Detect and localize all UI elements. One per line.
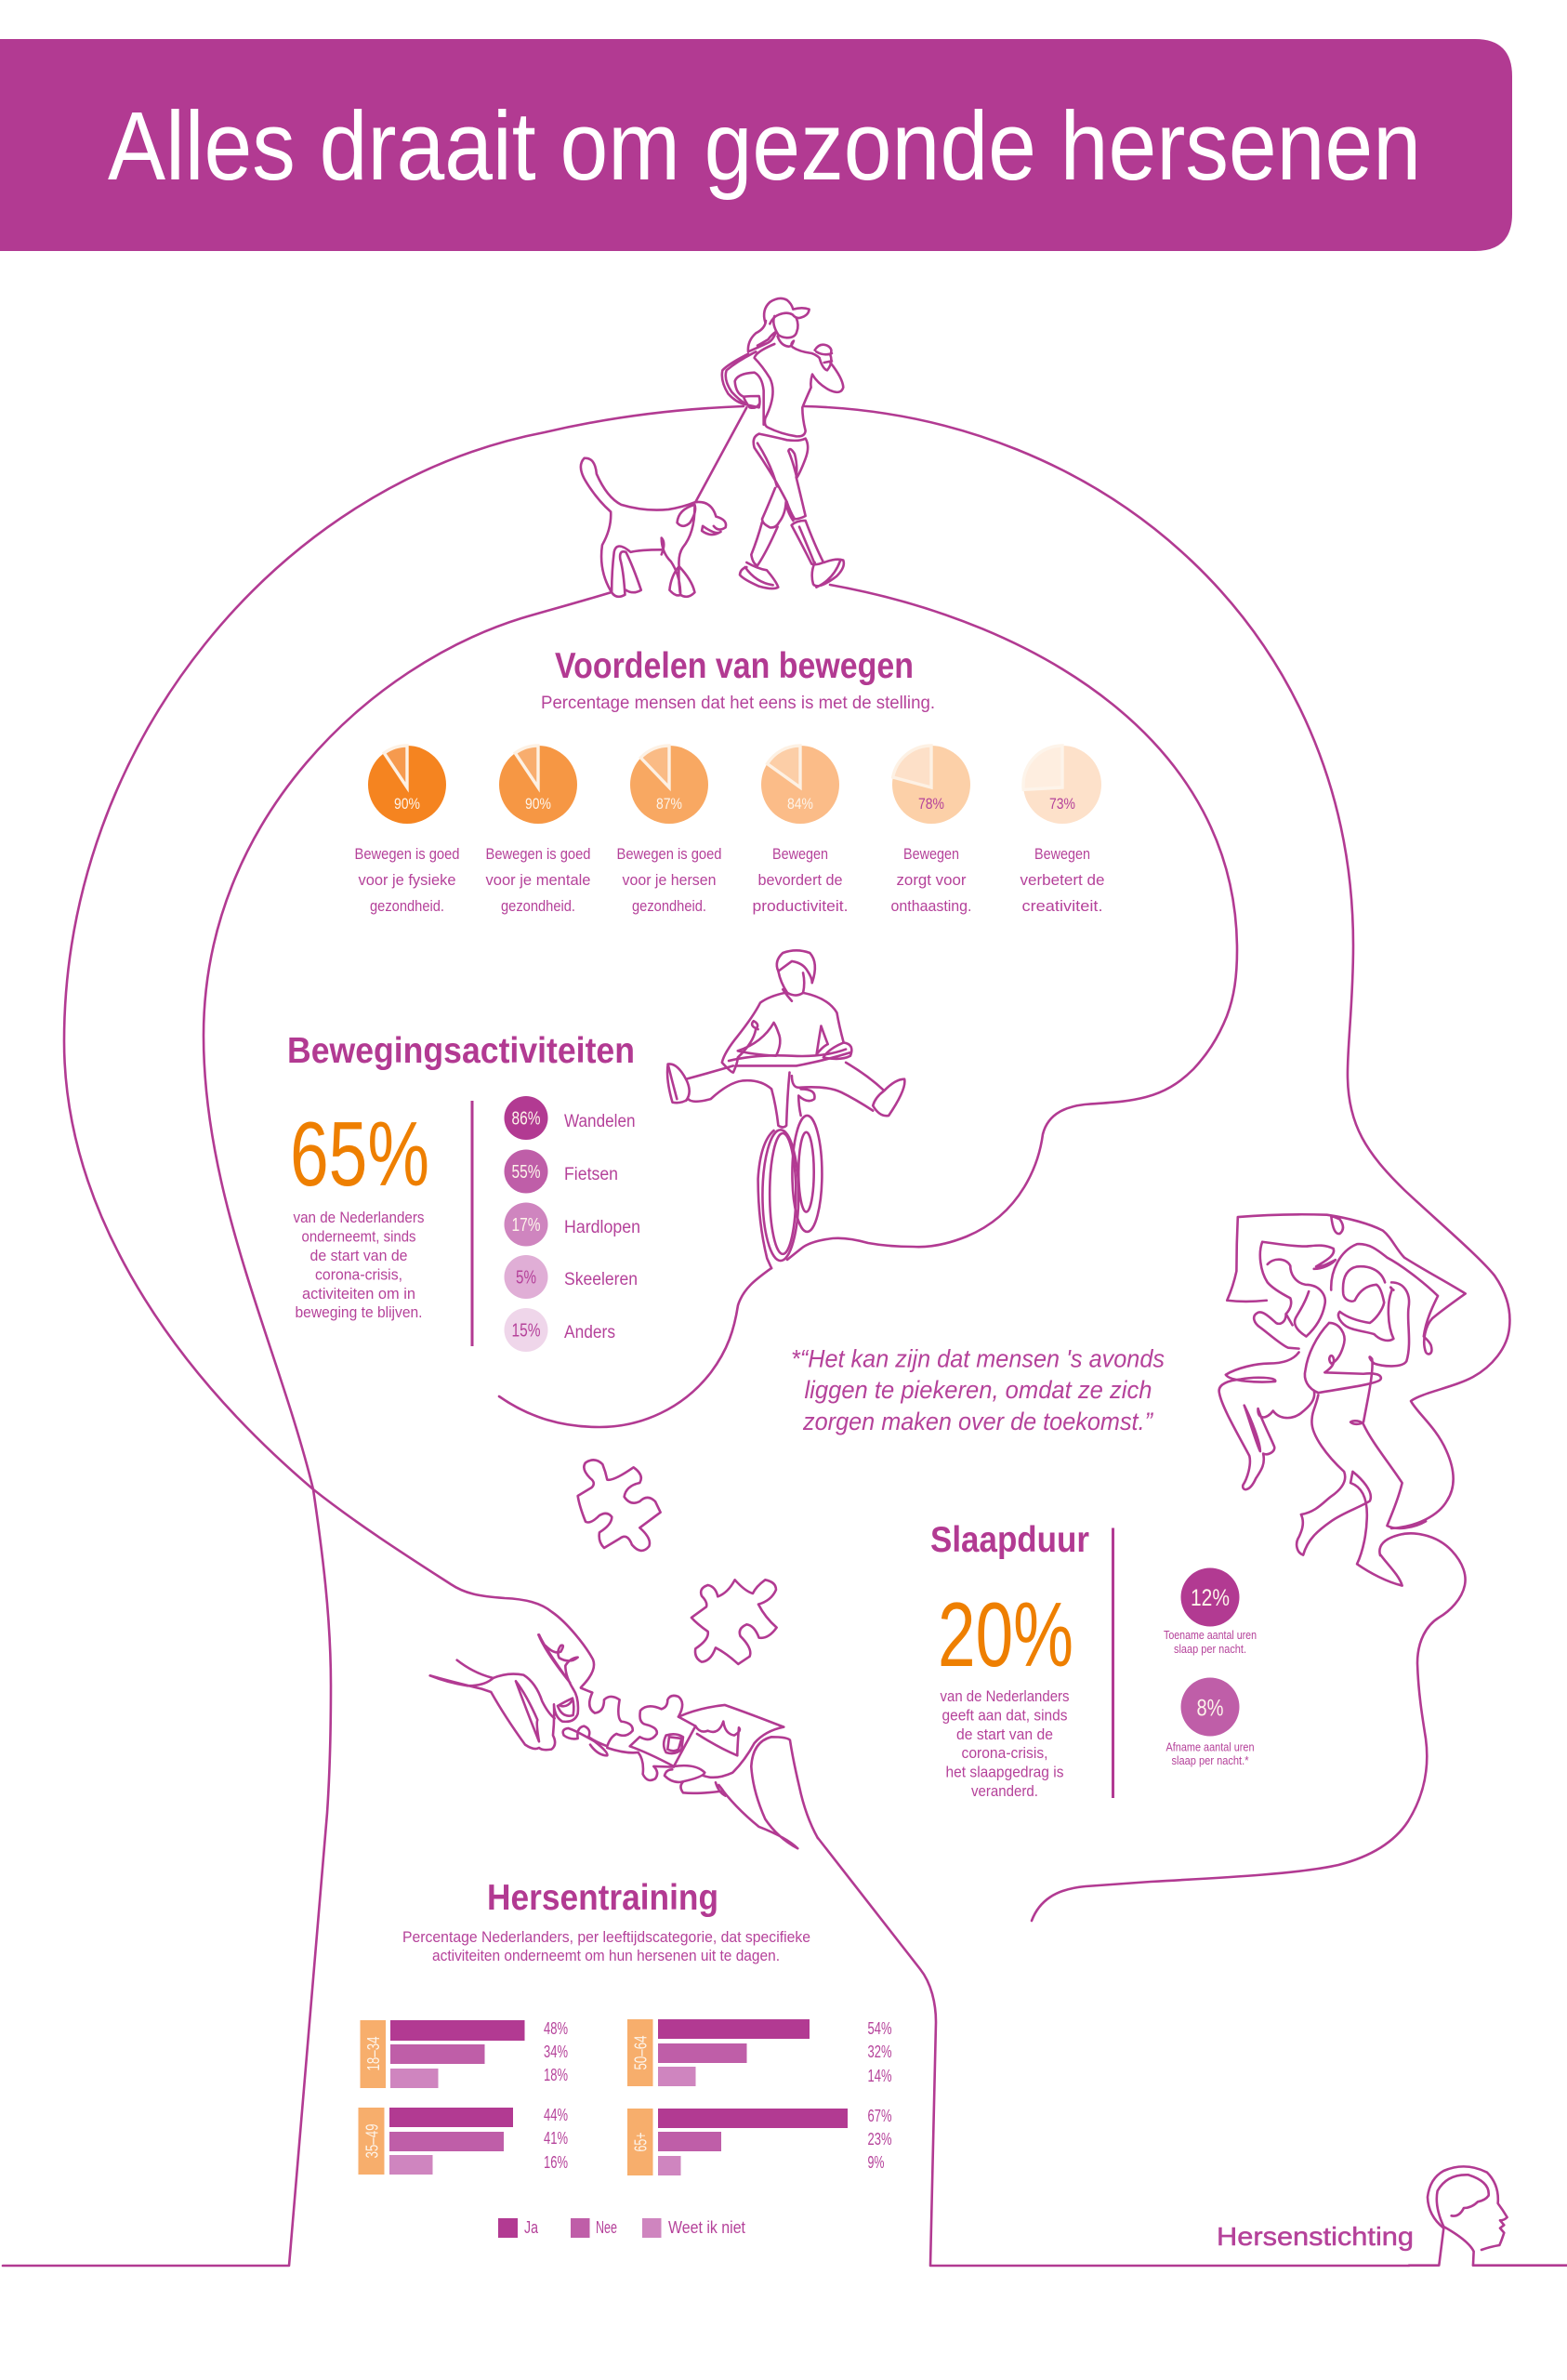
quote: zorgen maken over de toekomst.” bbox=[802, 1408, 1153, 1435]
description: het slaapgedrag is bbox=[946, 1763, 1063, 1781]
legend: Nee bbox=[596, 2218, 617, 2237]
stat: afname 8%: Afname aantal uren bbox=[1165, 1740, 1255, 1753]
bar group: 50–64: 54% bbox=[868, 2019, 892, 2038]
bar group: 50–64 bbox=[627, 2019, 892, 2086]
bar group: 18–34: 34% bbox=[544, 2043, 568, 2061]
stat: toename 12%: slaap per nacht. bbox=[1174, 1643, 1246, 1656]
brain outline: lower curl bbox=[499, 1268, 771, 1427]
legend: Weet ik niet bbox=[668, 2218, 745, 2237]
pie: productiviteit 84%: Bewegen bbox=[772, 845, 828, 863]
bar group: 65+ bbox=[627, 2107, 892, 2175]
description: corona-crisis, bbox=[315, 1266, 402, 1283]
description: veranderd. bbox=[971, 1782, 1038, 1800]
pie: productiviteit 84%: bevordert de bbox=[758, 871, 842, 889]
quote: liggen te piekeren, omdat ze zich bbox=[805, 1376, 1152, 1404]
illustration: sleeping couple bbox=[1219, 1214, 1466, 1586]
description: van de Nederlanders bbox=[941, 1687, 1069, 1705]
heading: Voordelen van bewegen bbox=[555, 646, 914, 686]
pie: fysieke gezondheid 90%: gezondheid. bbox=[370, 897, 444, 915]
logo head icon bbox=[1409, 2166, 1567, 2266]
head outline: neck back and baseline bbox=[3, 592, 612, 2266]
panel: voordelen van bewegen bbox=[355, 646, 1104, 915]
pie: onthaasting 78%: Bewegen bbox=[903, 845, 959, 863]
pie: fysieke gezondheid 90%: 90% bbox=[394, 795, 420, 813]
activity: fietsen: 55% bbox=[511, 1162, 541, 1183]
activity: anders bbox=[504, 1308, 615, 1352]
quote: *“Het kan zijn dat mensen 's avonds bbox=[791, 1344, 1165, 1372]
stat: toename 12%: 12% bbox=[1191, 1585, 1230, 1611]
bar group: 50–64: 14% bbox=[868, 2067, 892, 2085]
pie: fysieke gezondheid 90%: Bewegen is goed bbox=[355, 845, 459, 863]
description: beweging te blijven. bbox=[296, 1303, 422, 1321]
big number 65%: 65% bbox=[290, 1103, 429, 1205]
activity: fietsen: Fietsen bbox=[564, 1165, 618, 1184]
pie: creativiteit 73%: Bewegen bbox=[1034, 845, 1090, 863]
pie: mentale gezondheid 90%: voor je mentale bbox=[485, 871, 591, 889]
activity: anders: Anders bbox=[564, 1323, 615, 1342]
stat: toename 12% bbox=[1164, 1567, 1257, 1656]
panel: hersentraining bbox=[359, 1878, 892, 2238]
heading: Slaapduur bbox=[930, 1520, 1089, 1560]
activity: hardlopen: Hardlopen bbox=[564, 1218, 640, 1237]
activity: anders: 15% bbox=[511, 1320, 541, 1341]
illustration: dog bbox=[581, 458, 726, 597]
pie: hersen gezondheid 87%: Bewegen is goed bbox=[617, 845, 721, 863]
stat: afname 8%: 8% bbox=[1197, 1696, 1223, 1722]
subheading: activiteiten onderneemt om hun hersenen uit te dagen. bbox=[432, 1947, 780, 1964]
pie: hersen gezondheid 87%: voor je hersen bbox=[623, 871, 716, 889]
pie: productiviteit 84% bbox=[753, 746, 848, 915]
title banner bbox=[0, 39, 1512, 251]
bar group: 18–34: 18–34 bbox=[364, 2036, 383, 2071]
illustration: cyclist bbox=[667, 950, 904, 1268]
description: de start van de bbox=[956, 1726, 1053, 1743]
divider bbox=[470, 1101, 474, 1346]
brain outline: upper right bbox=[787, 585, 1237, 1260]
neck front and baseline bbox=[818, 1838, 1409, 2266]
heading: Bewegingsactiviteiten bbox=[287, 1031, 635, 1071]
description: corona-crisis, bbox=[961, 1744, 1048, 1762]
pie: hersen gezondheid 87%: 87% bbox=[656, 795, 682, 813]
head outline: face contour bbox=[804, 406, 1509, 1528]
activity: fietsen bbox=[504, 1149, 618, 1194]
bar group: 65+: 67% bbox=[868, 2107, 892, 2125]
activity: skeeleren: 5% bbox=[516, 1268, 536, 1289]
description: de start van de bbox=[310, 1247, 407, 1264]
pie: mentale gezondheid 90%: Bewegen is goed bbox=[485, 845, 591, 863]
subheading: Percentage Nederlanders, per leeftijdscategorie, dat specifieke bbox=[402, 1928, 810, 1946]
bar group: 65+: 23% bbox=[868, 2130, 892, 2149]
bar group: 18–34 bbox=[361, 2019, 568, 2088]
bar group: 35–49: 16% bbox=[544, 2153, 568, 2172]
bar group: 50–64: 50–64 bbox=[632, 2036, 651, 2069]
description bbox=[941, 1687, 1069, 1800]
pie: creativiteit 73%: verbetert de bbox=[1021, 871, 1104, 889]
pie: onthaasting 78% bbox=[890, 746, 972, 915]
legend bbox=[498, 2218, 745, 2238]
pie: onthaasting 78%: zorgt voor bbox=[896, 871, 967, 889]
activity: hardlopen bbox=[504, 1203, 640, 1246]
subheading: Percentage mensen dat het eens is met de stelling. bbox=[541, 694, 935, 713]
logo wordmark: Hersenstichting bbox=[1217, 2222, 1414, 2251]
legend: Ja bbox=[524, 2218, 539, 2237]
pie: onthaasting 78%: 78% bbox=[918, 795, 944, 813]
big number 20%: 20% bbox=[938, 1583, 1073, 1686]
heading: Hersentraining bbox=[487, 1878, 718, 1918]
pie: hersen gezondheid 87%: gezondheid. bbox=[632, 897, 706, 915]
pie: onthaasting 78%: onthaasting. bbox=[890, 897, 972, 915]
pie: creativiteit 73%: 73% bbox=[1049, 795, 1075, 813]
bar group: 18–34: 48% bbox=[544, 2019, 568, 2038]
stat: afname 8% bbox=[1165, 1677, 1255, 1767]
description: geeft aan dat, sinds bbox=[942, 1707, 1067, 1724]
pie: fysieke gezondheid 90% bbox=[355, 746, 459, 915]
stat: toename 12%: Toename aantal uren bbox=[1164, 1629, 1257, 1642]
pie: productiviteit 84%: productiviteit. bbox=[753, 897, 848, 915]
bar group: 65+: 9% bbox=[868, 2153, 885, 2172]
description: van de Nederlanders bbox=[294, 1209, 424, 1226]
illustration: runner bbox=[695, 298, 844, 588]
pie: creativiteit 73%: creativiteit. bbox=[1022, 897, 1102, 915]
head outline: outer left contour bbox=[64, 406, 744, 1687]
pie: mentale gezondheid 90% bbox=[485, 746, 591, 915]
bar group: 35–49: 44% bbox=[544, 2106, 568, 2124]
activity: wandelen bbox=[504, 1096, 636, 1140]
illustration: puzzle piece two bbox=[691, 1580, 777, 1664]
bar group: 35–49: 35–49 bbox=[362, 2123, 381, 2159]
activity: wandelen: 86% bbox=[511, 1108, 541, 1129]
quote bbox=[791, 1344, 1165, 1435]
panel: bewegingsactiviteiten bbox=[287, 1031, 640, 1352]
activity: skeeleren bbox=[504, 1255, 638, 1299]
head outline: chin contour bbox=[1032, 1533, 1466, 1921]
panel: slaapduur bbox=[930, 1520, 1257, 1800]
bar group: 35–49: 41% bbox=[544, 2129, 568, 2148]
subheading bbox=[402, 1928, 810, 1964]
pie: mentale gezondheid 90%: 90% bbox=[525, 795, 551, 813]
stat: afname 8%: slaap per nacht.* bbox=[1171, 1754, 1249, 1767]
pie: hersen gezondheid 87% bbox=[617, 746, 721, 915]
illustration: hands joining puzzle pieces bbox=[430, 1634, 818, 1848]
pie: mentale gezondheid 90%: gezondheid. bbox=[501, 897, 575, 915]
description bbox=[294, 1209, 424, 1321]
description: activiteiten om in bbox=[302, 1285, 415, 1302]
activity: skeeleren: Skeeleren bbox=[564, 1270, 638, 1289]
activity: wandelen: Wandelen bbox=[564, 1112, 636, 1131]
bar group: 18–34: 18% bbox=[544, 2066, 568, 2084]
pie: creativiteit 73% bbox=[1021, 746, 1104, 915]
pie: productiviteit 84%: 84% bbox=[787, 795, 813, 813]
pie: fysieke gezondheid 90%: voor je fysieke bbox=[359, 871, 455, 889]
description: onderneemt, sinds bbox=[301, 1227, 416, 1246]
bar group: 35–49 bbox=[359, 2106, 568, 2175]
logo: hersenstichting bbox=[1217, 2166, 1567, 2266]
bar group: 50–64: 32% bbox=[868, 2043, 892, 2061]
title: Alles draait om gezonde hersenen bbox=[108, 92, 1421, 201]
activity: hardlopen: 17% bbox=[511, 1215, 541, 1236]
bar group: 65+: 65+ bbox=[632, 2133, 651, 2151]
illustration: puzzle piece one bbox=[578, 1460, 661, 1551]
divider bbox=[1112, 1528, 1114, 1798]
